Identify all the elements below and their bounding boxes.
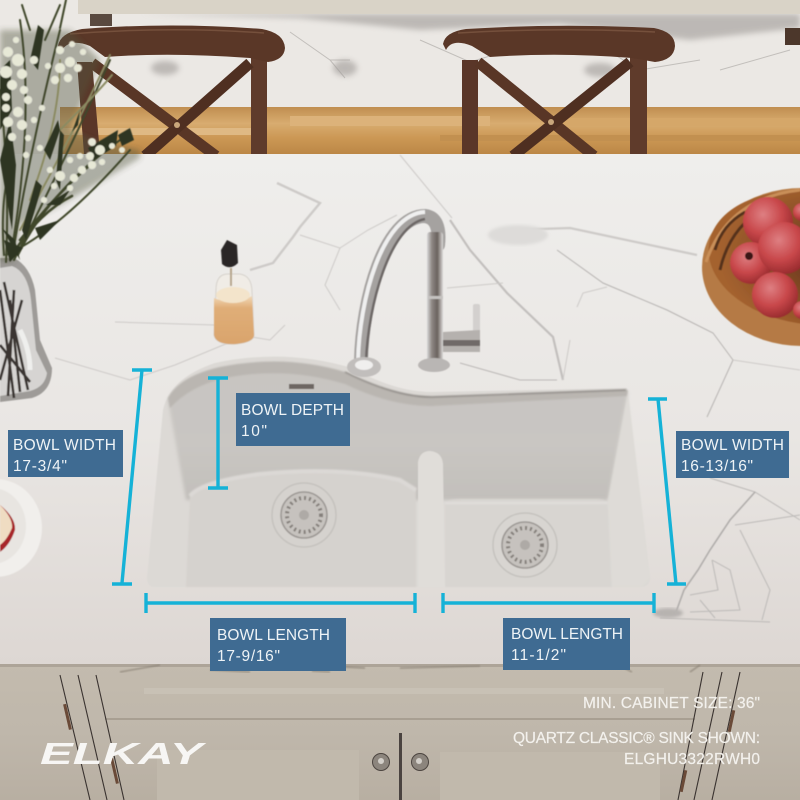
countertop <box>0 154 800 664</box>
right bowl floor <box>445 499 612 587</box>
right drain <box>493 513 557 577</box>
label: left bowl width: BOWL WIDTH <box>13 437 116 454</box>
chair right <box>443 26 675 156</box>
dimension line: left bowl length <box>146 593 415 613</box>
divider <box>418 451 445 587</box>
dimension line: left bowl width <box>112 370 152 584</box>
label: bowl depth: 10" <box>241 423 267 440</box>
label: left bowl length: BOWL LENGTH <box>217 627 330 644</box>
background: rug behind chairs <box>0 0 800 110</box>
sink basin <box>147 357 650 587</box>
label: bowl depth: BOWL DEPTH <box>241 402 344 419</box>
soap dispenser <box>214 240 254 344</box>
left bowl floor <box>186 471 416 587</box>
label: left bowl width: 17-3/4" <box>13 458 67 475</box>
cabinet size and model note: MIN. CABINET SIZE: 36" <box>583 695 760 712</box>
marble veins <box>55 155 800 622</box>
label: right bowl width: BOWL WIDTH <box>681 437 784 454</box>
left drain <box>272 483 336 547</box>
label: left bowl length <box>210 618 346 671</box>
label: right bowl length <box>503 618 630 670</box>
dimension line: right bowl width <box>648 399 686 584</box>
label: right bowl width: 16-13/16" <box>681 458 753 475</box>
foliage mass <box>0 30 140 262</box>
vase with stems <box>0 258 52 402</box>
wood floor <box>60 107 800 154</box>
label: right bowl width <box>676 431 789 478</box>
dimension line: right bowl length <box>443 593 654 613</box>
right bowl side wall <box>608 392 650 587</box>
Elkay logo: ELKAY <box>40 737 207 771</box>
sink <box>147 357 650 587</box>
counter edge flecks <box>120 665 700 672</box>
label: left bowl width <box>8 430 123 477</box>
dark furniture corner <box>785 28 800 45</box>
chair left <box>58 14 285 156</box>
cabinet size and model note: QUARTZ CLASSIC® SINK SHOWN: <box>513 730 760 747</box>
dimension line: bowl depth <box>208 378 228 488</box>
faucet <box>347 212 480 377</box>
sofa edge at top <box>78 0 800 14</box>
door knobs <box>372 754 428 770</box>
sink back wall <box>168 364 628 500</box>
label: bowl depth <box>236 393 350 446</box>
label: left bowl length: 17-9/16" <box>217 648 280 665</box>
cabinet size and model note <box>513 695 760 768</box>
cabinet <box>0 664 800 800</box>
label: right bowl length: 11-1/2" <box>511 647 566 664</box>
maker's plate <box>289 384 314 389</box>
plate with apple slice <box>0 479 42 577</box>
plant with white flowers <box>0 0 140 262</box>
fruit bowl with apples <box>700 179 800 346</box>
label: right bowl length: BOWL LENGTH <box>511 626 623 643</box>
cabinet size and model note: ELGHU3322RWH0 <box>624 751 760 768</box>
